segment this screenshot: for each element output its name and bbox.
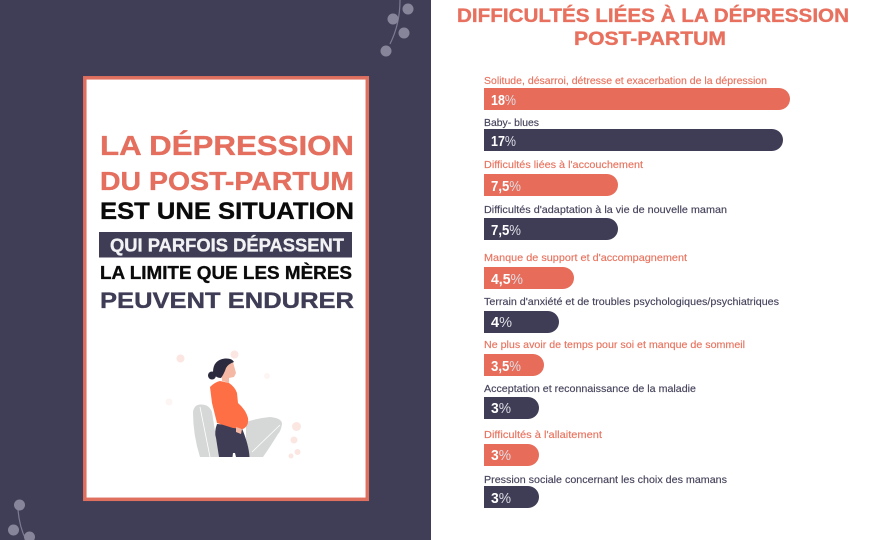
bar: allaitement 3%: 3% bbox=[491, 447, 511, 464]
icon: top branch decoration bbox=[380, 0, 414, 56]
heading: du post-partum: DU POST-PARTUM bbox=[100, 168, 354, 196]
bar: pression sociale 3% bbox=[484, 474, 727, 508]
bar: anxiété 4%: Terrain d'anxiété et de troubles psychologiques/psychiatriques bbox=[484, 296, 779, 308]
bar: allaitement 3%: Difficultés à l'allaitement bbox=[484, 429, 602, 441]
bar: sommeil 3,5%: Ne plus avoir de temps pour soi et manque de sommeil bbox=[484, 339, 745, 351]
bar: accouchement 7,5% bbox=[484, 159, 643, 196]
bar: pression sociale 3%: 3% bbox=[491, 490, 511, 507]
bar: baby-blues 17%: 17% bbox=[491, 133, 516, 150]
chart title bbox=[457, 4, 849, 50]
bar: adaptation 7,5%: Difficultés d'adaptation à la vie de nouvelle maman bbox=[484, 204, 727, 216]
panel: left dark background bbox=[0, 0, 431, 540]
bar: pression sociale 3%: Pression sociale concernant les choix des mamans bbox=[484, 474, 727, 486]
icon: pale floating hearts bbox=[166, 350, 301, 458]
bar: support 4,5%: Manque de support et d'accompagnement bbox=[484, 252, 687, 264]
heading: highlighted line: QUI PARFOIS DÉPASSENT bbox=[110, 234, 345, 256]
bar: acceptation 3%: 3% bbox=[491, 400, 511, 417]
bar: support 4,5% bbox=[484, 252, 687, 289]
icon: woman bbox=[208, 358, 250, 457]
illustration: pregnant woman and armchair bbox=[166, 350, 301, 458]
bar: baby-blues 17%: Baby- blues bbox=[484, 117, 539, 129]
bar: support 4,5%: 4,5% bbox=[491, 271, 523, 288]
bar: accouchement 7,5%: 7,5% bbox=[491, 178, 521, 195]
heading: la limite que les mères: LA LIMITE QUE LES MÈRES bbox=[100, 262, 352, 283]
heading: peuvent endurer: PEUVENT ENDURER bbox=[100, 288, 354, 313]
bar: anxiété 4%: 4% bbox=[491, 314, 512, 331]
icon: bottom branch decoration bbox=[8, 500, 35, 540]
chart title: POST-PARTUM bbox=[574, 28, 726, 50]
panel: right chart bbox=[457, 4, 849, 508]
chart title: DIFFICULTÉS LIÉES À LA DÉPRESSION bbox=[457, 4, 849, 27]
bar: baby-blues 17% bbox=[484, 117, 783, 151]
heading: est une situation: EST UNE SITUATION bbox=[100, 198, 354, 225]
icon: armchair bbox=[193, 404, 282, 457]
bar: acceptation 3% bbox=[484, 383, 696, 419]
heading: la dépression: LA DÉPRESSION bbox=[100, 130, 354, 161]
panel: white card with coral border bbox=[85, 78, 367, 499]
bar: sommeil 3,5%: 3,5% bbox=[491, 358, 521, 375]
bar: adaptation 7,5%: 7,5% bbox=[491, 222, 521, 239]
bar: solitude 18% bbox=[484, 75, 790, 110]
bar: acceptation 3%: Acceptation et reconnaissance de la maladie bbox=[484, 383, 696, 395]
bar: solitude 18%: 18% bbox=[491, 92, 516, 109]
bar: anxiété 4% bbox=[484, 296, 779, 333]
bar: solitude 18%: Solitude, désarroi, détresse et exacerbation de la dépression bbox=[484, 75, 767, 87]
bar: sommeil 3,5% bbox=[484, 339, 745, 376]
bar: allaitement 3% bbox=[484, 429, 602, 466]
bar: accouchement 7,5%: Difficultés liées à l'accouchement bbox=[484, 159, 643, 171]
bar: adaptation 7,5% bbox=[484, 204, 727, 240]
